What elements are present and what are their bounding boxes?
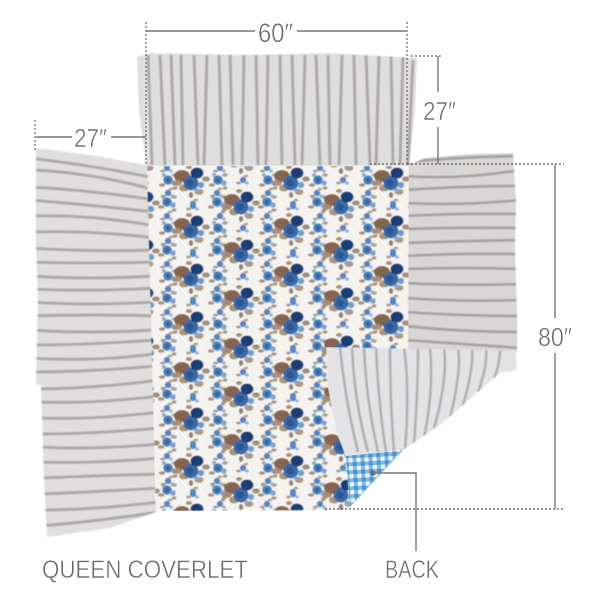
panel: left ruffle <box>30 148 160 537</box>
panel: top ruffle <box>137 53 417 166</box>
dimension: length 80 inches <box>325 164 572 509</box>
dimension: side ruffle 27 inches <box>35 120 146 153</box>
dimension: width 60 inches: 60″ <box>258 18 293 48</box>
dimension: width 60 inches <box>146 18 407 166</box>
label: back: BACK <box>385 556 439 584</box>
dimension: length 80 inches: 80″ <box>538 322 572 352</box>
callout: back leader line <box>370 470 416 551</box>
dimension: top ruffle 27 inches <box>370 56 456 164</box>
panel: right ruffle <box>405 153 520 352</box>
panel: floral quilt centre <box>147 166 409 511</box>
panel: folded striped corner <box>326 347 517 456</box>
dimension: top ruffle 27 inches: 27″ <box>423 96 456 126</box>
dimension: side ruffle 27 inches: 27″ <box>74 123 107 153</box>
panel: gingham back <box>346 450 403 507</box>
title: queen coverlet: QUEEN COVERLET <box>42 556 248 584</box>
